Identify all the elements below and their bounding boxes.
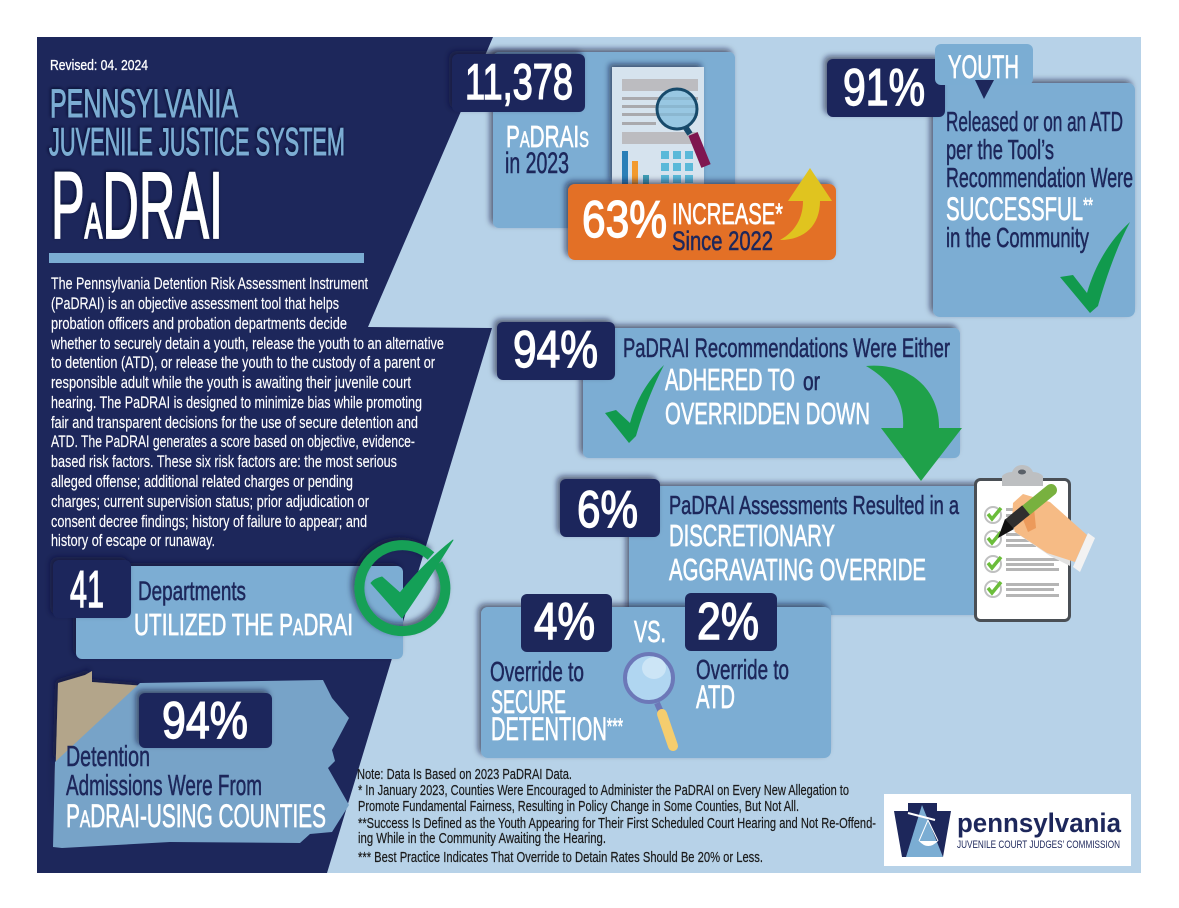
stat badge: 11,378: 11,378 <box>465 54 573 110</box>
tab: youth: YOUTH <box>948 49 1019 85</box>
panel: 4% vs 2% <box>481 593 831 758</box>
icon: green check in circle <box>359 540 453 631</box>
description text block: responsible adult while the youth is awaiting their juvenile court <box>51 373 411 392</box>
stat badge: 94%: 94% <box>162 692 248 750</box>
panel: youth 91% <box>827 44 1135 317</box>
footnotes: * In January 2023, Counties Were Encouraged to Administer the PaDRAI on Every New Allegation to <box>358 782 849 799</box>
callout: 63% increase: INCREASE* <box>672 198 783 231</box>
panel: 6% aggravating override: DISCRETIONARY <box>669 518 835 553</box>
panel: 6% aggravating override: AGGRAVATING OVERRIDE <box>669 552 926 587</box>
youth text: per the Tool’s <box>946 134 1054 165</box>
label: PaDRAIs: PADRAIS <box>506 119 589 154</box>
description text block: ATD. The PaDRAI generates a score based on objective, evidence- <box>51 432 415 451</box>
logo: Pennsylvania Juvenile Court Judges' Commission <box>884 794 1131 866</box>
description text block: consent decree findings; history of failure to appear; and <box>51 512 367 531</box>
callout: 63% increase: Since 2022 <box>672 226 773 256</box>
panel: 41 departments <box>53 560 403 659</box>
footnotes: Promote Fundamental Fairness, Resulting in Policy Change in Some Counties, But Not All. <box>358 798 799 815</box>
description text block <box>50 274 444 550</box>
tab: youth <box>935 44 1033 99</box>
title line: Juvenile Justice System: JUVENILE JUSTICE SYSTEM <box>49 121 345 164</box>
label: detention: Detention <box>66 741 150 773</box>
footnotes: *** Best Practice Indicates That Override to Detain Rates Should Be 20% or Less. <box>358 849 763 866</box>
navy side panel <box>37 37 493 873</box>
description text block: whether to securely detain a youth, release the youth to an alternative <box>50 334 444 353</box>
stat badge: 41: 41 <box>70 561 104 619</box>
description text block: history of escape or runaway. <box>51 531 215 550</box>
youth text: ** <box>1083 195 1093 217</box>
description text block: charges; current supervision status; prior adjudication or <box>51 492 369 511</box>
label: admissions: Admissions Were From <box>66 770 262 802</box>
icon: report with magnifier <box>612 67 706 184</box>
footnotes <box>357 766 876 866</box>
panel: 4% vs 2%: *** <box>607 714 623 739</box>
stat badge: 91%: 91% <box>843 59 925 117</box>
panel: 4% vs 2%: SECURE <box>491 684 566 720</box>
title line: Pennsylvania: PENNSYLVANIA <box>50 82 238 126</box>
callout: 63% increase: 63% <box>582 191 667 249</box>
vs label: VS. <box>634 614 666 649</box>
revised date: Revised: 04. 2024 <box>50 58 148 74</box>
title line: PaDRAI: PADRAI <box>51 153 223 259</box>
description text block: (PaDRAI) is an objective assessment tool that helps <box>51 294 339 313</box>
panel: 4% vs 2%: ATD <box>696 679 735 715</box>
map corner: tan <box>54 671 145 825</box>
description text block: based risk factors. These six risk factors are: the most serious <box>51 452 397 471</box>
description text block: The Pennsylvania Detention Risk Assessment Instrument <box>51 274 368 293</box>
callout: 63% increase <box>568 168 836 260</box>
panel: 94% adhered to: PaDRAI Recommendations Were Either <box>623 333 950 363</box>
label: utilized the PaDRAI: UTILIZED THE PADRAI <box>134 607 353 642</box>
panel: 94% adhered to: OVERRIDDEN DOWN <box>665 396 870 431</box>
panel: 11,378 PaDRAIs <box>452 52 735 228</box>
map: Pennsylvania shape <box>53 680 349 848</box>
panel: 4% vs 2%: Override to <box>490 656 584 687</box>
youth text: in the Community <box>946 222 1089 253</box>
panel: 6% aggravating override <box>560 479 985 615</box>
panel: 94% adhered to: ADHERED TO <box>665 362 795 397</box>
arrow: green curved down <box>866 366 962 481</box>
panel: 94% adhered to <box>497 321 960 458</box>
description text block: to detention (ATD), or release the youth to the custody of a parent or <box>51 353 435 372</box>
youth text: SUCCESSFUL <box>946 191 1161 227</box>
panel: Pennsylvania map 94% <box>53 671 349 848</box>
description text block: fair and transparent decisions for the use of secure detention and <box>51 413 418 432</box>
footnotes: ing While in the Community Awaiting the Hearing. <box>358 830 606 847</box>
description text block: alleged offense; additional related charges or pending <box>51 472 353 491</box>
icon: magnifying glass <box>625 654 673 746</box>
description text block: probation officers and probation departments decide <box>51 314 347 333</box>
panel: 94% adhered to: or <box>803 366 820 396</box>
logo: Pennsylvania Juvenile Court Judges' Commission: pennsylvania <box>957 808 1122 838</box>
icon: yellow up arrow <box>780 168 832 240</box>
icon: large check <box>1060 222 1130 313</box>
icon: small check <box>605 365 664 443</box>
label: PaDRAI-using counties: PADRAI-USING COUNTIES <box>66 798 326 834</box>
stat badge: 4%: 4% <box>534 593 595 651</box>
panel: 4% vs 2%: DETENTION <box>491 711 676 747</box>
footnotes: Note: Data Is Based on 2023 PaDRAI Data. <box>357 766 572 783</box>
logo: Pennsylvania Juvenile Court Judges' Commission: JUVENILE COURT JUDGES’ COMMISSION <box>957 839 1120 851</box>
logo icon: keystone with scales <box>894 803 951 857</box>
stat badge: 94%: 94% <box>513 321 598 379</box>
panel: 6% aggravating override: PaDRAI Assessments Resulted in a <box>669 490 959 520</box>
icon: clipboard with hand <box>976 465 1095 620</box>
description text block: hearing. The PaDRAI is designed to minimize bias while promoting <box>51 393 422 412</box>
stat badge: 6%: 6% <box>577 481 638 539</box>
panel: 4% vs 2%: Override to <box>696 654 789 685</box>
label: in 2023: in 2023 <box>505 147 569 180</box>
youth text <box>946 106 1133 253</box>
label: departments: Departments <box>138 576 246 606</box>
footnotes: **Success Is Defined as the Youth Appearing for Their First Scheduled Court Hearing and Not Re-Offend- <box>358 815 876 832</box>
stat badge: 2%: 2% <box>697 593 759 651</box>
title <box>49 82 345 259</box>
